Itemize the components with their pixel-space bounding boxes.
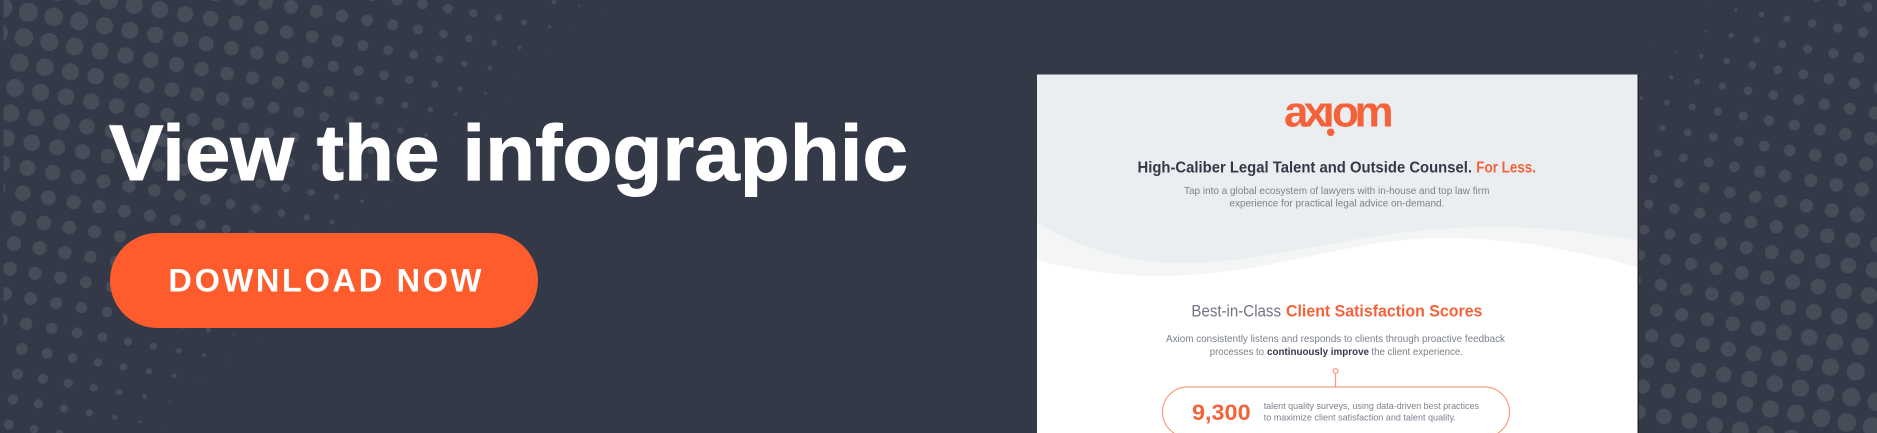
wave: white body: [1037, 238, 1638, 433]
card heading: For Less.: [1476, 160, 1536, 177]
section description: continuously improve: [1267, 346, 1369, 358]
stat pill: 9,300 surveys: 9,300: [1192, 400, 1251, 425]
section description: processes to: [1210, 346, 1264, 358]
card intro text: experience for practical legal advice on-demand.: [1229, 197, 1444, 209]
section heading: Best-in-Class: [1191, 303, 1281, 321]
download button: DOWNLOAD NOW: [168, 263, 482, 299]
card intro text: [1184, 185, 1490, 209]
wave: light band: [1037, 223, 1638, 285]
stat pill: 9,300 surveys: talent quality surveys, using data-driven best practices: [1264, 401, 1479, 412]
section description: the client experience.: [1371, 346, 1463, 358]
infographic preview card: [1037, 74, 1639, 433]
section description: [1166, 333, 1506, 358]
axiom logo: [1285, 104, 1391, 136]
card intro text: Tap into a global ecosystem of lawyers with in-house and top law firm: [1184, 185, 1490, 197]
stat pill: 9,300 surveys: to maximize client satisfaction and talent quality.: [1264, 413, 1456, 424]
halftone dots: right: [1630, 0, 1877, 433]
halftone dots: left: [0, 0, 605, 433]
axiom logo: axiom: [1284, 88, 1394, 136]
title: View the infographic: [109, 108, 908, 197]
section description: Axiom consistently listens and responds to clients through proactive feedback: [1166, 333, 1506, 345]
download button: [110, 233, 538, 328]
card heading: High-Caliber Legal Talent and Outside Counsel.: [1138, 160, 1472, 177]
stat pill: 9,300 surveys: [1162, 387, 1510, 433]
section heading: [1191, 303, 1482, 321]
connector: [1333, 369, 1338, 387]
section heading: Client Satisfaction Scores: [1286, 303, 1482, 321]
